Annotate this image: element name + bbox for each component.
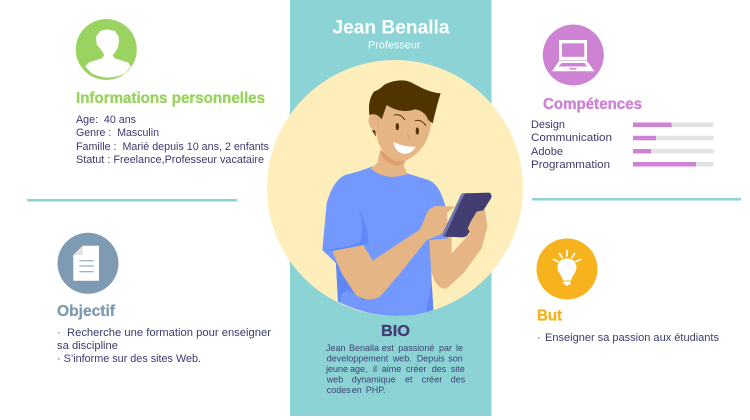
biography text: créer xyxy=(406,364,427,374)
objective text: · Recherche une formation pour enseigner xyxy=(57,327,271,339)
skill labels: Programmation xyxy=(531,159,610,171)
objective text: · S’informe sur des sites Web. xyxy=(57,353,201,365)
heading: BIO xyxy=(381,323,410,340)
biography text: developpement xyxy=(327,354,389,364)
panel: central teal column xyxy=(290,0,492,416)
panel: skills xyxy=(531,24,714,171)
skill labels: Adobe xyxy=(531,146,563,158)
biography text: site xyxy=(451,364,465,374)
hair xyxy=(369,80,441,123)
biography text: codes xyxy=(327,385,351,395)
icon: laptop xyxy=(543,24,604,86)
right arm and hand xyxy=(428,210,487,289)
eyes xyxy=(396,123,399,130)
biography text: en xyxy=(352,385,362,395)
icon: document xyxy=(58,233,118,294)
biography text: Benalla xyxy=(349,343,379,353)
biography text: jeune xyxy=(325,364,348,374)
biography text xyxy=(325,343,466,395)
head xyxy=(368,100,433,162)
skill labels xyxy=(531,119,612,171)
left arm and hand xyxy=(332,206,455,299)
biography text: et xyxy=(405,374,413,384)
skill labels: Communication xyxy=(531,132,612,144)
biography text: son xyxy=(448,354,463,364)
biography text: web. xyxy=(392,354,412,364)
icon: user xyxy=(76,19,137,80)
portrait background circle xyxy=(267,60,523,316)
details text: Statut : Freelance,Professeur vacataire xyxy=(76,154,264,166)
shirt shadows xyxy=(322,200,433,312)
title: name: Jean Benalla xyxy=(332,18,450,38)
nose xyxy=(407,133,409,139)
biography text: PHP. xyxy=(366,385,386,395)
biography text: il xyxy=(373,364,377,374)
biography text: des xyxy=(451,374,466,384)
heading: But xyxy=(537,308,563,324)
biography text: passioné xyxy=(398,343,434,353)
heading: Informations personnelles xyxy=(76,90,265,107)
biography text: le xyxy=(456,343,463,353)
details text xyxy=(76,114,269,166)
goal text: · xyxy=(537,332,541,344)
heading: Objectif xyxy=(57,303,116,320)
details text: Famille : Marié depuis 10 ans, 2 enfants xyxy=(76,141,269,153)
panel: objective xyxy=(57,233,271,365)
objective text: sa discipline xyxy=(57,340,118,352)
biography text: dynamique xyxy=(352,374,396,384)
subtitle: role: Professeur xyxy=(368,40,421,52)
panel: personal information xyxy=(76,19,269,166)
details text: Genre : Masculin xyxy=(76,127,159,139)
shirt xyxy=(322,167,448,316)
biography text: Depuis xyxy=(417,354,445,364)
biography text: des xyxy=(432,364,447,374)
smile xyxy=(393,142,416,154)
ear detail xyxy=(372,118,378,127)
biography text: Jean xyxy=(326,343,346,353)
skill labels: Design xyxy=(531,119,565,131)
goal text: Enseigner sa passion aux étudiants xyxy=(545,332,719,344)
neck xyxy=(371,150,407,177)
biography text: age, xyxy=(350,364,368,374)
details text: Age: 40 ans xyxy=(76,114,136,126)
fingers on tablet xyxy=(468,210,487,235)
skill bars xyxy=(633,122,714,166)
biography text: web xyxy=(326,374,343,384)
illustration: man with tablet xyxy=(322,80,492,316)
panel: biography xyxy=(325,323,466,395)
eyebrows xyxy=(394,115,426,126)
panel: goal xyxy=(536,238,719,344)
biography text: aime xyxy=(382,364,401,374)
icon: light bulb xyxy=(536,238,598,300)
biography text: est xyxy=(382,343,394,353)
heading: Compétences xyxy=(543,96,642,113)
objective text xyxy=(57,327,271,365)
biography text: par xyxy=(439,343,452,353)
biography text: créer xyxy=(422,374,442,384)
tablet xyxy=(442,193,492,237)
